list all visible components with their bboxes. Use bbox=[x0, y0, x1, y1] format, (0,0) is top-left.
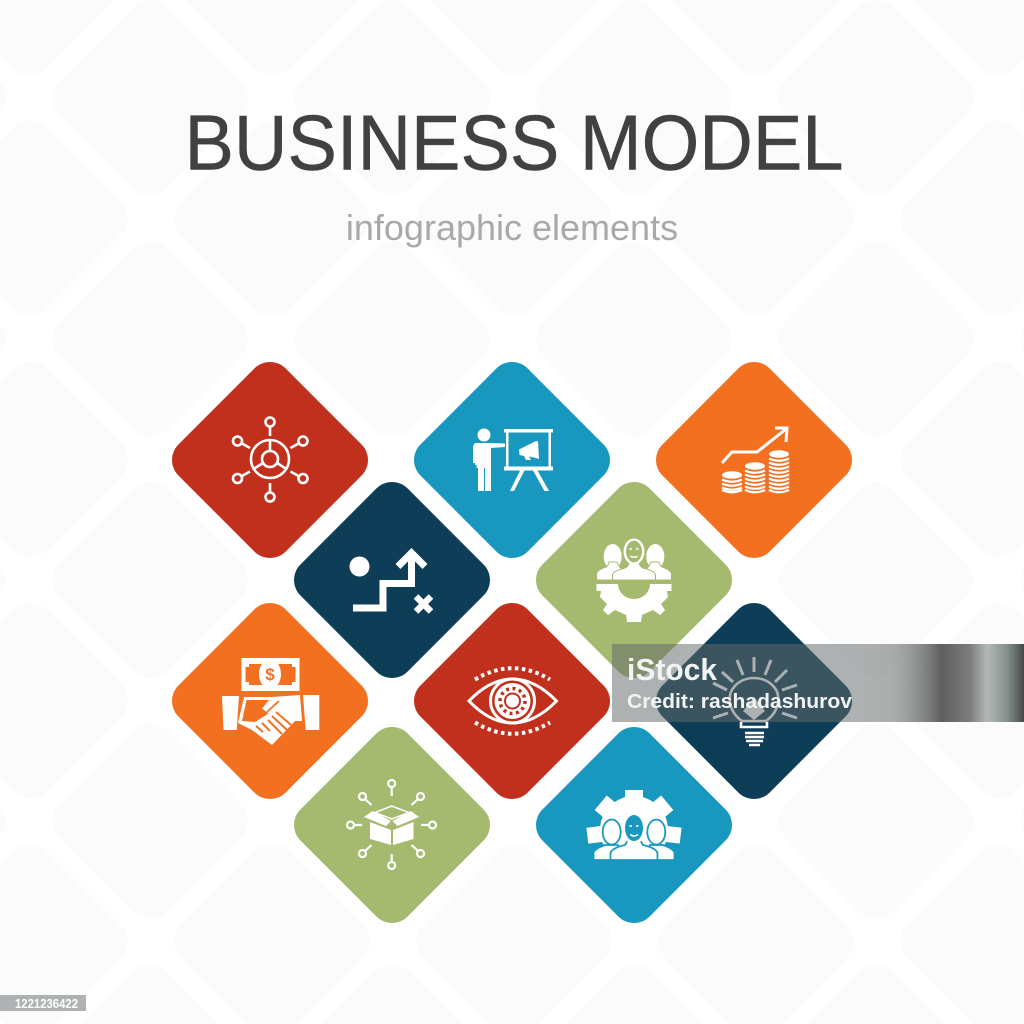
watermark logo: iStock bbox=[627, 652, 718, 687]
panel: blue team gear diamond bbox=[536, 727, 732, 923]
image id tag: 1221236422 bbox=[15, 997, 78, 1011]
icon: banknote and handshake: $ bbox=[265, 665, 275, 684]
panel: red network diamond bbox=[163, 353, 377, 567]
icon: stairs with arrow, dot and cross bbox=[350, 553, 431, 612]
panel: green product diamond bbox=[285, 718, 499, 932]
title: BUSINESS MODEL bbox=[184, 98, 844, 186]
panel: orange deal diamond bbox=[163, 594, 377, 808]
icon: team above gear bbox=[596, 538, 672, 622]
panel: navy strategy diamond bbox=[285, 473, 499, 687]
panel: orange growth diamond bbox=[647, 353, 861, 567]
icon: coin stacks and rising arrow bbox=[722, 428, 789, 492]
icon: banknote and handshake bbox=[222, 658, 319, 745]
icon: eye bbox=[469, 668, 556, 734]
icon: team in gear bbox=[586, 790, 682, 864]
watermark credit: Credit: rashadashurov bbox=[627, 691, 853, 713]
panel: green team gear diamond bbox=[536, 482, 732, 678]
watermark banner bbox=[612, 644, 1024, 722]
icon: network hub bbox=[233, 418, 308, 502]
panel: red vision diamond bbox=[405, 594, 619, 808]
subtitle: infographic elements bbox=[346, 207, 678, 248]
icon: presenter with megaphone board bbox=[473, 428, 553, 491]
icon: open box with nodes bbox=[347, 780, 436, 869]
icon: light bulb bbox=[713, 657, 797, 745]
panel: blue presentation diamond bbox=[405, 353, 619, 567]
panel: navy idea diamond bbox=[647, 594, 861, 808]
